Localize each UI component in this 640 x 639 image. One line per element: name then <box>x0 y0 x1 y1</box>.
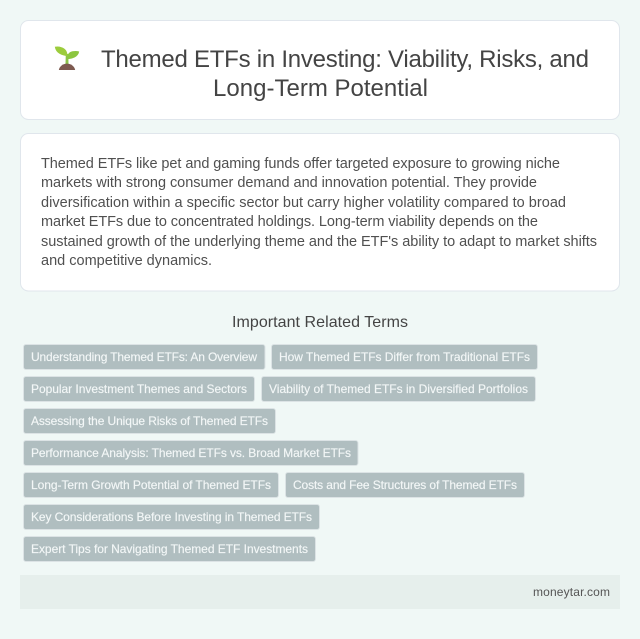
panel: title card <box>20 20 620 120</box>
text block: summary: diversification within a specific sector but carry higher volatility compared to broad <box>41 195 566 211</box>
tag: understanding: Understanding Themed ETFs: An Overview <box>31 350 257 364</box>
text block: summary: Themed ETFs like pet and gaming funds offer targeted exposure to growing niche <box>41 156 560 172</box>
footer: source: moneytar.com <box>533 585 610 599</box>
tag: popular themes: Popular Investment Themes and Sectors <box>31 382 247 396</box>
tag: differ <box>272 344 538 370</box>
panel: summary paragraph <box>20 134 620 291</box>
heading: title <box>101 46 589 102</box>
text block: summary: market ETFs due to concentrated holdings. Long-term viability depends on the <box>41 214 538 230</box>
text block: summary: and competitive dynamics. <box>41 253 212 269</box>
tag: considerations <box>24 504 320 530</box>
tag: expert tips <box>24 536 316 562</box>
tag: costs <box>286 472 524 498</box>
tag: popular themes <box>24 376 254 402</box>
tag: viability <box>262 376 536 402</box>
text block: summary: markets with strong consumer demand and innovation potential. They provide <box>41 175 537 191</box>
tag: long-term growth: Long-Term Growth Potential of Themed ETFs <box>31 478 271 492</box>
tag: risks: Assessing the Unique Risks of Themed ETFs <box>31 414 268 428</box>
text block: summary <box>41 156 597 269</box>
tag: performance: Performance Analysis: Themed ETFs vs. Broad Market ETFs <box>31 446 351 460</box>
heading: title: Themed ETFs in Investing: Viability, Risks, and <box>101 46 589 73</box>
text block: summary: sustained growth of the underlying theme and the ETF's ability to adapt to market shifts <box>41 234 597 250</box>
tag: risks <box>24 408 276 434</box>
tag: long-term growth <box>24 472 278 498</box>
tag: viability: Viability of Themed ETFs in Diversified Portfolios <box>269 382 528 396</box>
tag: considerations: Key Considerations Before Investing in Themed ETFs <box>31 510 312 524</box>
icon: sprout <box>55 46 79 70</box>
tag: performance <box>24 440 358 466</box>
tag: expert tips: Expert Tips for Navigating Themed ETF Investments <box>31 542 308 556</box>
footer bar <box>20 575 620 609</box>
heading: title: Long-Term Potential <box>213 75 428 102</box>
tag: understanding <box>24 344 265 370</box>
heading: important related terms: Important Related Terms <box>232 314 408 331</box>
tag: differ: How Themed ETFs Differ from Traditional ETFs <box>279 350 530 364</box>
tag list: related terms <box>24 344 538 562</box>
tag: costs: Costs and Fee Structures of Themed ETFs <box>293 478 517 492</box>
